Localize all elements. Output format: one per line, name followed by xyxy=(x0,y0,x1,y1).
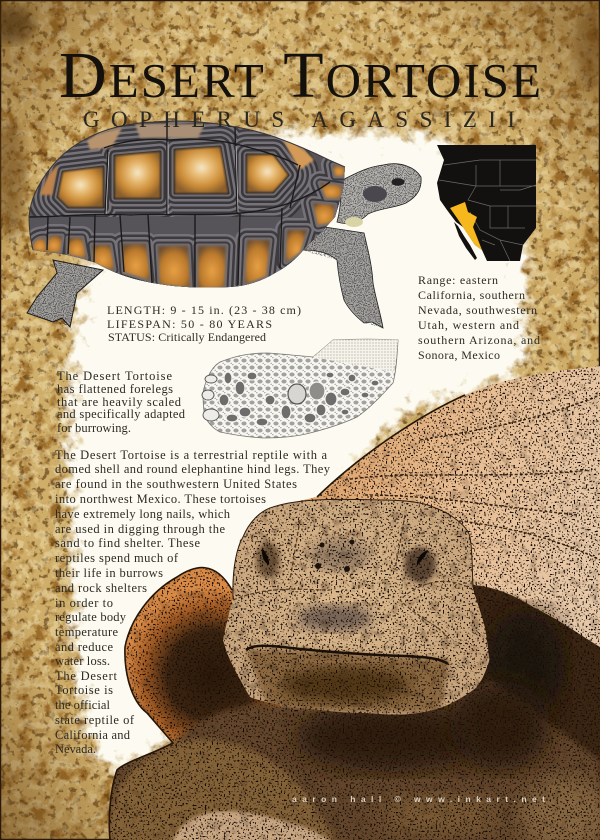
eye xyxy=(392,178,404,186)
stats: length lifespan status xyxy=(107,303,301,344)
text: main description: are found in the southwestern United States xyxy=(55,477,297,491)
map: range in western North America xyxy=(437,145,536,261)
text: range: southern Arizona, and xyxy=(418,333,540,347)
text: forelegs note: and specifically adapted xyxy=(57,407,186,421)
finely stippled upper leg xyxy=(313,339,398,372)
head markings xyxy=(363,186,387,202)
shell outline xyxy=(29,121,345,250)
shell and body xyxy=(100,350,600,840)
text: forelegs note: that are heavily scaled xyxy=(57,395,182,409)
text: main description: Nevada. xyxy=(55,742,96,756)
marginal scute centres xyxy=(33,165,345,288)
nose shading xyxy=(297,605,373,631)
neck and head xyxy=(337,164,421,224)
nostril spots xyxy=(315,540,354,572)
text: range: Sonora, Mexico xyxy=(418,348,500,362)
bottom rim xyxy=(96,264,290,292)
rear leg xyxy=(27,260,103,327)
text: main description: sand to find shelter. These xyxy=(55,536,200,550)
scute seams xyxy=(29,123,330,288)
text: forelegs note: The Desert Tortoise xyxy=(57,369,172,383)
head outline xyxy=(233,499,490,687)
stats: length lifespan status: LENGTH: 9 - 15 in. (23 - 38 cm) xyxy=(107,303,301,317)
text: forelegs note xyxy=(57,369,186,435)
text: main description: and rock shelters xyxy=(55,581,147,595)
text: main description: their life in burrows xyxy=(55,566,163,580)
cavity core shadow xyxy=(485,610,565,720)
scute growth rings xyxy=(58,147,288,207)
text: main description: reptiles spend much of xyxy=(55,551,179,565)
text: main description: have extremely long nails, which xyxy=(55,507,231,521)
shell xyxy=(30,122,345,288)
text: main description: Tortoise is xyxy=(55,683,113,697)
head xyxy=(223,498,490,714)
text: main description: temperature xyxy=(55,625,118,639)
text: range: Range: eastern xyxy=(418,273,498,287)
illustration: scaled foreleg xyxy=(202,339,398,438)
coarse mottling xyxy=(100,350,600,840)
text: main description: regulate body xyxy=(55,610,127,624)
text: forelegs note: for burrowing. xyxy=(57,421,131,435)
stipple layer xyxy=(100,350,600,840)
Baja peninsula xyxy=(454,222,477,260)
illustration: desert tortoise profile xyxy=(26,120,422,329)
text: range: Utah, western and xyxy=(418,318,519,332)
neck and front limb xyxy=(100,680,600,840)
dark cavity beside head xyxy=(424,585,600,840)
fore leg xyxy=(300,227,383,328)
upper tan patches xyxy=(40,124,314,195)
stipple on legs and head xyxy=(28,164,421,328)
state borders xyxy=(439,160,536,261)
text: main description: The Desert Tortoise is a terrestrial reptile with a xyxy=(55,448,327,462)
text: main description: state reptile of xyxy=(55,713,135,727)
stats: length lifespan status: LIFESPAN: 50 - 80 YEARS xyxy=(107,317,272,331)
text: main description: the official xyxy=(55,698,111,712)
facial folds xyxy=(233,515,473,640)
text: forelegs note: has flattened forelegs xyxy=(57,382,173,396)
stats: length lifespan status: STATUS: Critically Endangered xyxy=(108,330,266,344)
text: main description: and reduce xyxy=(55,640,113,654)
title: DESERT TORTOISE xyxy=(59,39,541,112)
text: main description: domed shell and round elephantine hind legs. They xyxy=(55,462,331,476)
text: main description xyxy=(55,448,331,756)
eye shadow left xyxy=(256,542,280,578)
black land mass xyxy=(437,145,536,261)
text: range: California, southern xyxy=(418,288,525,302)
subtitle: GOPHERUS AGASSIZII xyxy=(83,107,515,132)
vertebral and costal scute centres xyxy=(58,147,288,207)
text: main description: water loss. xyxy=(55,654,110,668)
text: main description: California and xyxy=(55,728,131,742)
illustration: stippled tortoise close-up xyxy=(100,350,600,840)
marginal growth rings xyxy=(35,217,333,288)
text: range xyxy=(418,273,540,362)
shell lower lobe xyxy=(126,540,280,743)
text: main description: in order to xyxy=(55,596,113,610)
text: main description: into northwest Mexico. These tortoises xyxy=(55,492,266,506)
credit: aaron hall © www.inkart.net xyxy=(292,794,545,804)
toes xyxy=(202,375,219,421)
large scales xyxy=(219,372,379,426)
left eye xyxy=(262,548,269,565)
text: main description: The Desert xyxy=(55,669,118,683)
shell outline xyxy=(109,395,465,840)
text: main description: are used in digging through the xyxy=(55,522,225,536)
range highlighted in yellow xyxy=(450,202,482,250)
eye shadow right xyxy=(404,547,436,583)
plastron pale patch xyxy=(345,217,363,227)
lower jaw shading xyxy=(245,650,450,712)
text: range: Nevada, southwestern xyxy=(418,303,537,317)
shell growth lines xyxy=(345,395,600,560)
mouth line xyxy=(246,646,448,664)
right eye xyxy=(417,550,428,566)
